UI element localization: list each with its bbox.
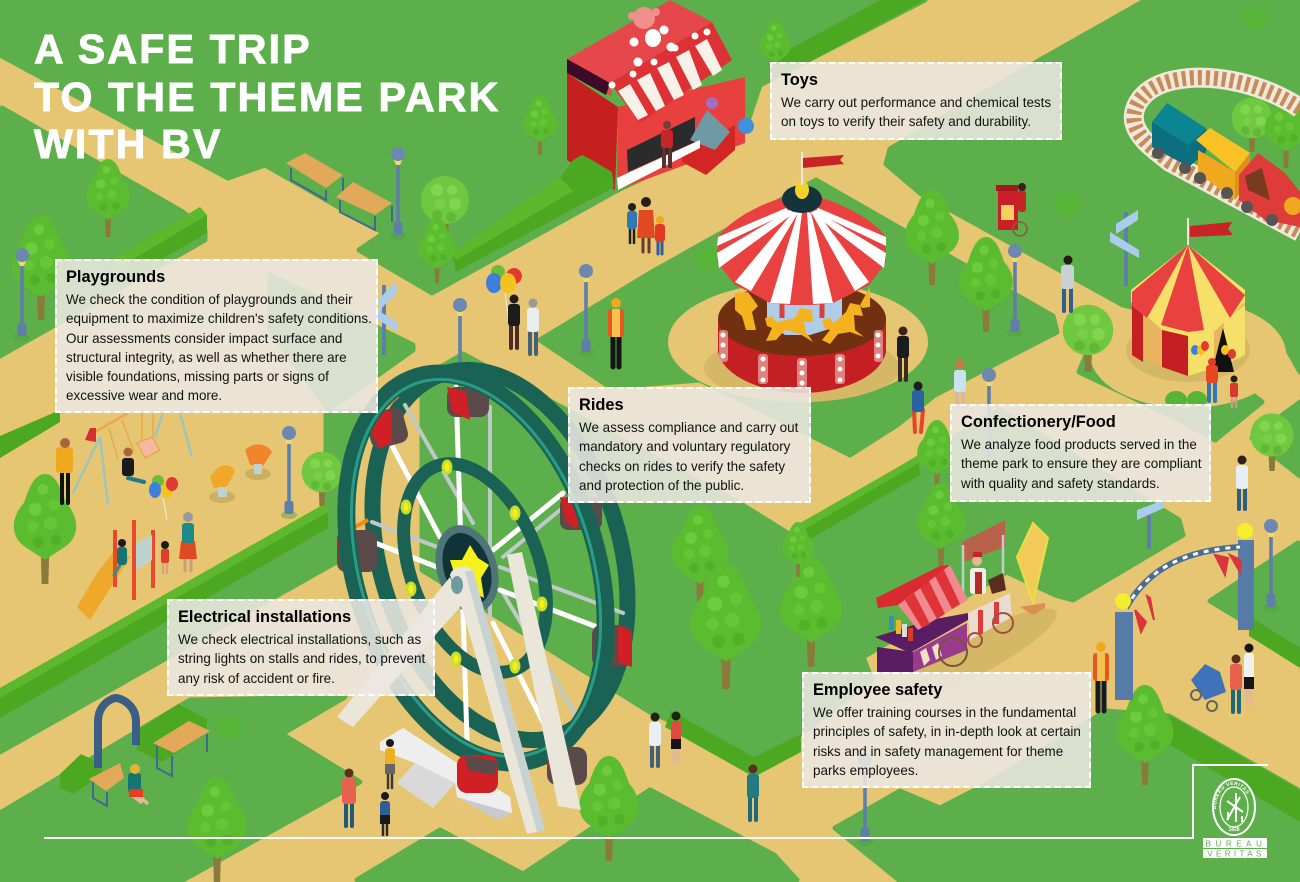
panel: electrical installations: string lights on stalls and rides, to prevent (178, 651, 425, 666)
carousel horses (735, 287, 870, 344)
signposts (370, 210, 1164, 549)
panel: playgrounds: excessive wear and more. (66, 388, 222, 403)
panel: toys: on toys to verify their safety and durability. (781, 114, 1031, 129)
panel: employee safety: parks employees. (813, 763, 918, 778)
stroller (1191, 664, 1226, 711)
gondolas (337, 387, 632, 667)
panel: toys: We carry out performance and chemical tests (781, 95, 1051, 110)
logo: Bureau Veritas: VERITAS (1207, 850, 1265, 858)
panel: employee safety: We offer training courses in the fundamental (813, 705, 1076, 720)
panel: electrical installations: We check electrical installations, such as (178, 632, 421, 647)
title: WITH BV (34, 121, 222, 167)
logo: Bureau Veritas (1203, 778, 1267, 858)
circus tent (1126, 218, 1250, 382)
ice-cream cart and sign (875, 520, 1066, 716)
balloons: visitors (486, 265, 522, 330)
ferris wheel (302, 338, 670, 834)
train and track (1134, 78, 1300, 232)
panel: rides: We assess compliance and carry out (579, 420, 798, 435)
logo: Bureau Veritas: BUREAU (1206, 840, 1266, 848)
panel: electrical installations: any risk of accident or fire. (178, 671, 335, 686)
swing set (73, 413, 192, 505)
cart body (913, 623, 967, 672)
carousel flag (803, 155, 844, 168)
garden arbor (98, 698, 136, 768)
drum lights (719, 330, 883, 388)
support frame (337, 552, 581, 834)
panel: toys (770, 62, 1062, 140)
panel: employee safety: principles of safety, in in-depth look at certain (813, 724, 1081, 739)
carousel plaza (668, 282, 928, 402)
tent flag (1190, 222, 1233, 237)
panel: playgrounds: We check the condition of playgrounds and their (66, 292, 353, 307)
panel: confectionery and food: with quality and safety standards. (961, 476, 1160, 491)
panel: playgrounds (55, 259, 378, 413)
panel: rides: checks on rides to verify the safety (579, 459, 785, 474)
panel: rides: Rides (579, 396, 624, 414)
panel: playgrounds: Our assessments consider impact surface and (66, 331, 342, 346)
balloons: circus (1191, 341, 1236, 359)
slide (77, 520, 153, 620)
vendor (970, 552, 1006, 594)
spring riders (209, 444, 272, 503)
panel: confectionery and food (950, 404, 1211, 502)
panel: playgrounds: Playgrounds (66, 268, 165, 286)
bottom gondolas (457, 747, 587, 793)
benches (89, 153, 392, 806)
balloons: playground (149, 475, 178, 520)
back ring (330, 338, 670, 772)
panel: toys: Toys (781, 71, 818, 89)
panel: confectionery and food: Confectionery/Food (961, 413, 1116, 431)
title (34, 26, 500, 167)
title: TO THE THEME PARK (34, 74, 500, 120)
cart awning (898, 565, 968, 630)
ring lights (402, 461, 546, 672)
popcorn cart (996, 183, 1027, 236)
panel: rides: and protection of the public. (579, 478, 744, 493)
wheels (939, 613, 1013, 666)
logo: Bureau Veritas: BUREAU VERITAS (1214, 782, 1249, 809)
inner ring (376, 443, 574, 693)
panel: playgrounds: equipment to maximize children's safety conditions. (66, 311, 372, 326)
hedge at shop corner (560, 155, 614, 200)
panel: employee safety (802, 672, 1091, 788)
panel: confectionery and food: We analyze food products served in the (961, 437, 1197, 452)
panel: playgrounds: visible foundations, missing parts or signs of (66, 369, 329, 384)
carousel (704, 152, 900, 402)
visitors and staff (56, 197, 1254, 835)
panel: employee safety: risks and in safety management for theme (813, 744, 1063, 759)
panel: electrical installations (167, 599, 435, 696)
rear of cart (968, 593, 1012, 640)
panel: rides (568, 387, 811, 503)
stair platform (380, 728, 512, 820)
spokes (355, 387, 623, 742)
bottles (889, 616, 913, 641)
ice-cream cone sign (1017, 523, 1048, 615)
hub and star (425, 517, 509, 621)
logo: Bureau Veritas: 1828 (1228, 827, 1240, 833)
teddy bear on roof (628, 7, 676, 66)
playground (73, 413, 272, 620)
panel: rides: mandatory and voluntary regulatory (579, 439, 790, 454)
panel: confectionery and food: theme park to ensure they are compliant (961, 456, 1202, 471)
cart signboard (962, 520, 1005, 562)
title: A SAFE TRIP (34, 26, 312, 72)
panel: electrical installations: Electrical installations (178, 608, 351, 626)
front ring (302, 341, 650, 795)
shop vendor (661, 121, 673, 168)
circus plaza (1090, 300, 1286, 408)
toy shop (560, 0, 754, 200)
frame line (44, 765, 1268, 838)
entrance arch (1115, 523, 1254, 700)
panel: employee safety: Employee safety (813, 681, 942, 699)
lamp posts (14, 147, 1279, 846)
panel: playgrounds: structural integrity, as well as whether there are (66, 350, 347, 365)
